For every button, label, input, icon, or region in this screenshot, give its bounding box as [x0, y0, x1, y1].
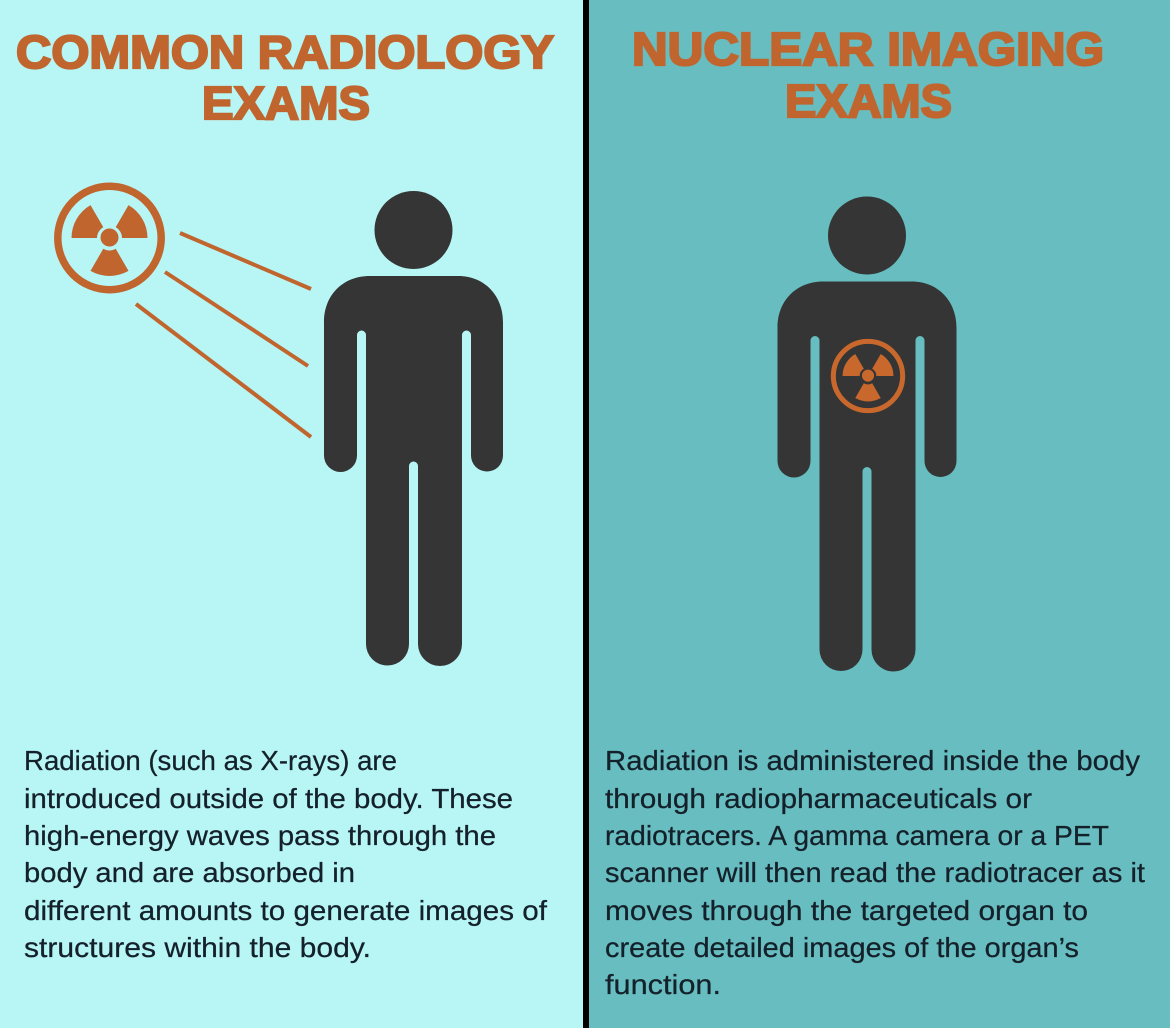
arrow: radiation rays toward body	[136, 233, 311, 437]
icon: radiation symbol inside body	[833, 341, 903, 411]
text block: nuclear imaging description: through radiopharmaceuticals or	[605, 783, 1032, 814]
icon: human figure with internal radiation	[778, 196, 956, 672]
heading: nuclear imaging exams: EXAMS	[785, 75, 952, 127]
figure silhouette	[778, 196, 956, 672]
text block: radiology description: high-energy waves pass through the	[24, 820, 496, 851]
text block: nuclear imaging description: create detailed images of the organ’s	[605, 932, 1079, 963]
text block: nuclear imaging description: moves through the targeted organ to	[605, 895, 1088, 926]
text block: radiology description: Radiation (such as X-rays) are	[24, 745, 397, 776]
icon: radiation symbol	[58, 186, 161, 290]
heading: nuclear imaging exams: NUCLEAR IMAGING	[632, 23, 1104, 75]
text block: nuclear imaging description: Radiation is administered inside the body	[605, 745, 1140, 776]
text block: nuclear imaging description: radiotracers. A gamma camera or a PET	[605, 820, 1109, 851]
heading: common radiology exams	[16, 26, 554, 129]
panel: common radiology exams	[0, 0, 584, 1028]
heading: common radiology exams: EXAMS	[202, 77, 370, 129]
text block: radiology description: body and are absorbed in	[24, 857, 355, 888]
text block: nuclear imaging description: function.	[605, 969, 721, 1000]
heading: common radiology exams: COMMON RADIOLOGY	[16, 26, 554, 78]
text block: radiology description: different amounts to generate images of	[24, 895, 547, 926]
text block: nuclear imaging description	[605, 745, 1145, 1000]
text block: radiology description: introduced outside of the body. These	[24, 783, 513, 814]
text block: nuclear imaging description: scanner will then read the radiotracer as it	[605, 857, 1145, 888]
text block: radiology description	[24, 745, 547, 963]
heading: nuclear imaging exams	[632, 23, 1104, 127]
text block: radiology description: structures within the body.	[24, 932, 371, 963]
icon: human figure	[324, 191, 503, 666]
panel: nuclear imaging exams	[588, 0, 1170, 1028]
center divider	[583, 0, 589, 1028]
